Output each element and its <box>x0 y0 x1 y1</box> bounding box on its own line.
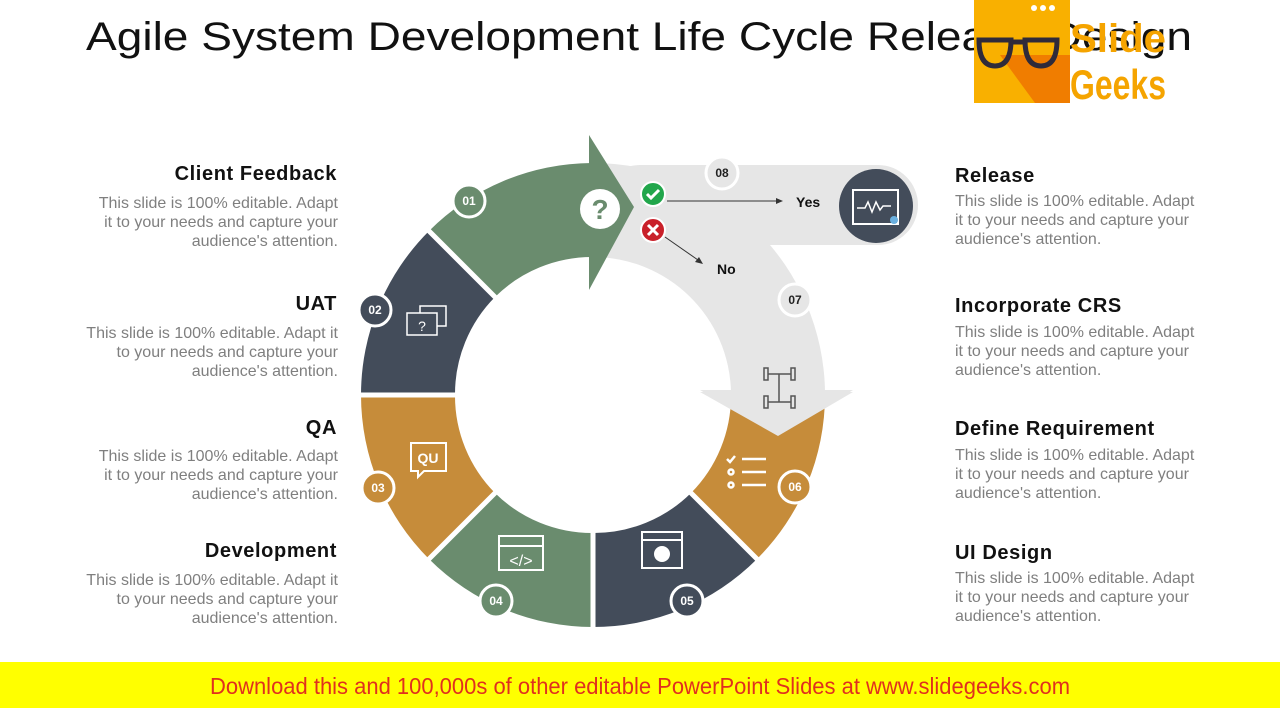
text block: Incorporate CRS <box>955 295 1195 379</box>
text block: Define Requirement <box>955 418 1195 502</box>
icon: 07 diagram <box>764 368 795 408</box>
text block: Development <box>86 540 339 627</box>
text block: Release: it to your needs and capture your <box>955 212 1190 229</box>
text block: Client Feedback: This slide is 100% editable. Adapt <box>99 195 339 212</box>
footer banner <box>0 662 1280 708</box>
text block: UAT: UAT <box>296 293 337 315</box>
arrow: no: No <box>717 261 736 277</box>
icon: 06 checklist <box>727 456 766 488</box>
cycle diagram: 03 <box>371 481 385 495</box>
segment 05 <box>593 493 757 627</box>
cycle diagram: 06 <box>788 480 802 494</box>
text block: Define Requirement: it to your needs and capture your <box>955 466 1190 483</box>
text block: Release: Release <box>955 165 1035 187</box>
text block: Client Feedback: audience's attention. <box>192 233 338 250</box>
icon: 04 code window <box>499 536 543 570</box>
cycle diagram <box>359 135 918 629</box>
segment 07 gray band and arrow <box>593 163 918 436</box>
text block: Development: audience's attention. <box>192 610 338 627</box>
text block: UI Design <box>955 542 1195 625</box>
icon: 04 code window: </> <box>509 553 533 570</box>
segment 03 <box>361 395 495 559</box>
text block: UAT <box>86 293 339 380</box>
segment 02 <box>361 231 495 395</box>
arrow: yes <box>667 194 820 210</box>
icon: yes check <box>641 182 665 206</box>
segment 01 green arrow <box>429 135 634 297</box>
title: Agile System Development Life Cycle Release Design <box>86 15 1192 59</box>
number badges <box>359 157 811 617</box>
text block: Define Requirement: audience's attention. <box>955 485 1101 502</box>
text block: Client Feedback <box>99 163 339 250</box>
text block: Development: This slide is 100% editable. Adapt it <box>86 572 339 589</box>
segment 04 <box>429 493 593 627</box>
text block: UI Design: This slide is 100% editable. Adapt <box>955 570 1195 587</box>
cycle diagram: 05 <box>680 594 694 608</box>
cycle diagram: 04 <box>489 594 503 608</box>
text block: Incorporate CRS: Incorporate CRS <box>955 295 1122 317</box>
text block: UI Design: audience's attention. <box>955 608 1101 625</box>
text block: Incorporate CRS: it to your needs and capture your <box>955 343 1190 360</box>
text block: Incorporate CRS: This slide is 100% editable. Adapt <box>955 324 1195 341</box>
text block: UAT: This slide is 100% editable. Adapt it <box>86 325 339 342</box>
logo: slidegeeks: Slide <box>1070 17 1166 61</box>
icon: 03 chat QU: QU <box>418 450 438 466</box>
icon: question: ? <box>591 194 609 225</box>
segment 06 <box>691 395 825 559</box>
text block: Development: to your needs and capture your <box>117 591 339 608</box>
text block: Define Requirement: Define Requirement <box>955 418 1155 440</box>
text block: Release: audience's attention. <box>955 231 1101 248</box>
logo: slidegeeks <box>974 0 1166 108</box>
icon: 02 screens: ? <box>418 318 426 334</box>
icon: release monitor <box>839 169 913 243</box>
text block: Define Requirement: This slide is 100% editable. Adapt <box>955 447 1195 464</box>
arrow: no <box>665 237 736 277</box>
icon: 03 chat QU <box>411 443 446 477</box>
icon: question <box>580 189 620 229</box>
text block: UAT: audience's attention. <box>192 363 338 380</box>
text block: UI Design: UI Design <box>955 542 1053 564</box>
cycle diagram: 07 <box>788 293 802 307</box>
text block: Development: Development <box>205 540 337 562</box>
text block: UI Design: it to your needs and capture your <box>955 589 1190 606</box>
cycle diagram: 01 <box>462 194 476 208</box>
text block: QA: it to your needs and capture your <box>104 467 339 484</box>
arrow: yes: Yes <box>796 194 820 210</box>
icon: 05 palette window <box>642 532 682 568</box>
text block: Release <box>955 165 1195 248</box>
text block: Incorporate CRS: audience's attention. <box>955 362 1101 379</box>
cycle diagram: 02 <box>368 303 382 317</box>
logo: slidegeeks: Geeks <box>1070 61 1166 108</box>
text block: Client Feedback: Client Feedback <box>175 163 337 185</box>
cycle diagram: 08 <box>715 166 729 180</box>
text block: QA: This slide is 100% editable. Adapt <box>99 448 339 465</box>
icon: no cross <box>641 218 665 242</box>
footer banner: Download this and 100,000s of other editable PowerPoint Slides at www.slidegeeks.com <box>210 673 1070 699</box>
text block: QA <box>99 417 339 503</box>
text block: Client Feedback: it to your needs and capture your <box>104 214 339 231</box>
text block: Release: This slide is 100% editable. Adapt <box>955 193 1195 210</box>
icon: 02 screens <box>407 306 446 335</box>
text block: QA: audience's attention. <box>192 486 338 503</box>
text block: QA: QA <box>306 417 337 439</box>
text block: UAT: to your needs and capture your <box>117 344 339 361</box>
